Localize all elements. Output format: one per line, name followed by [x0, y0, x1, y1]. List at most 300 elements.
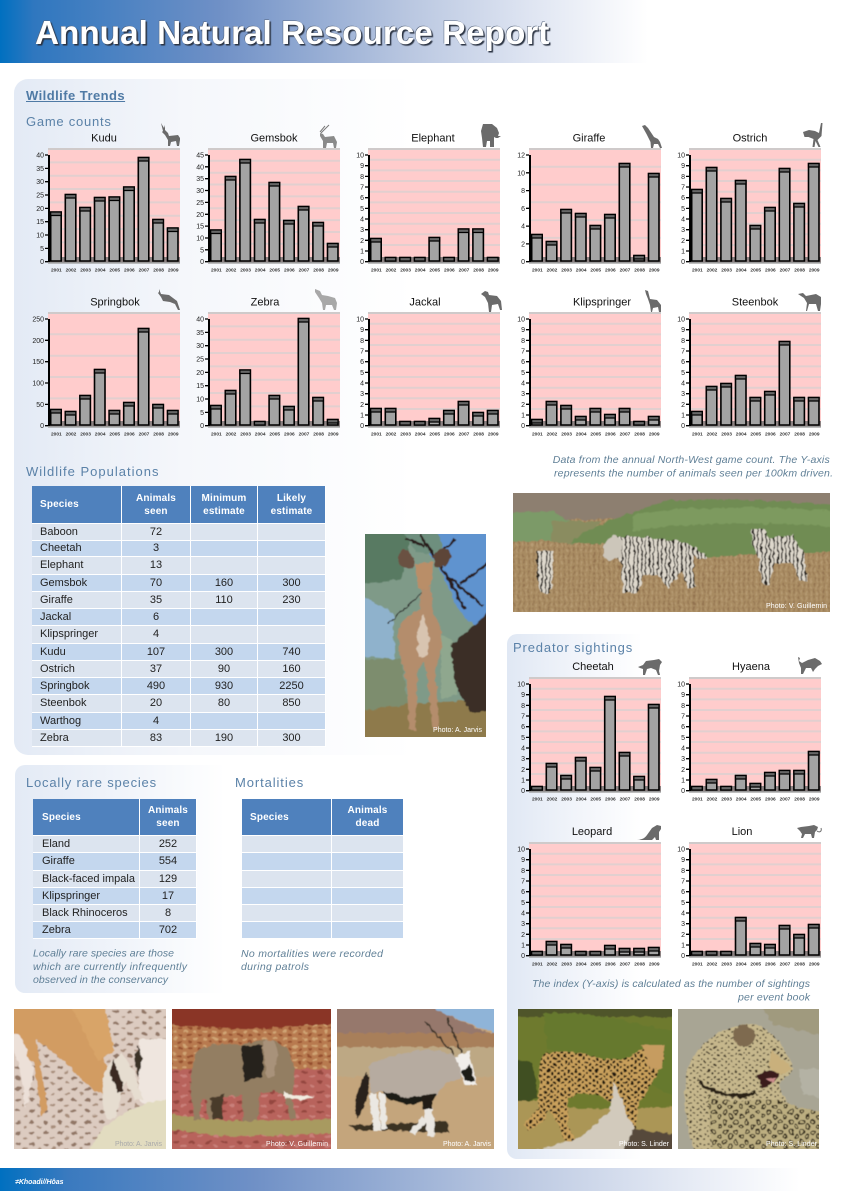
chart: zebra: Zebra	[251, 296, 280, 308]
chart: leopard: 8	[521, 868, 525, 875]
chart: lion: 2001 2002 2003 2004 2005 2006 2007 2008 2009	[692, 962, 820, 968]
chart: zebra: 0	[200, 423, 204, 430]
chart: gemsbok: 15	[196, 224, 204, 231]
chart: steenbok: 0	[681, 423, 685, 430]
chart: klipspringer: 10	[517, 316, 525, 324]
chart: steenbok: 7	[681, 348, 685, 356]
chart: elephant: 10	[356, 152, 364, 160]
chart: elephant: 5	[360, 206, 364, 213]
table: wildlife populations: Animals	[136, 492, 176, 504]
chart: klipspringer: 3	[521, 391, 525, 398]
chart: leopard: 7	[521, 878, 525, 886]
chart: klipspringer: 1	[521, 412, 525, 420]
chart: klipspringer: 6	[521, 359, 525, 366]
chart: leopard: 6	[521, 889, 525, 896]
chart: cheetah: 5	[521, 735, 525, 742]
chart: hyaena: 6	[681, 724, 685, 731]
icon: klipspringer	[645, 290, 661, 312]
chart: zebra: 2001 2002 2003 2004 2005 2006 2007 2008 2009	[211, 432, 339, 438]
chart: ostrich: 2001 2002 2003 2004 2005 2006 2007 2008 2009	[692, 268, 820, 274]
table: wildlife populations: 90	[218, 662, 230, 674]
photo: leopard	[678, 1009, 819, 1149]
chart: klipspringer: 0	[521, 423, 525, 430]
table: wildlife populations: seen	[144, 506, 168, 516]
chart: klipspringer: 5	[521, 370, 525, 377]
chart: ostrich: 8	[681, 174, 685, 181]
chart: lion: 0	[681, 953, 685, 960]
chart: ostrich: 9	[681, 163, 685, 170]
chart: hyaena: 10	[677, 682, 685, 688]
chart: ostrich: 1	[681, 248, 685, 256]
icon: hyaena	[798, 657, 822, 674]
chart: lion: 9	[681, 857, 685, 864]
note: no mortalities: during patrols	[241, 961, 310, 973]
chart: jackal: 2001 2002 2003 2004 2005 2006 2007 2008 2009	[371, 432, 499, 438]
chart: leopard: 9	[521, 857, 525, 864]
icon: lion	[797, 825, 821, 838]
photo: springbok: Photo: A. Jarvis	[115, 1141, 162, 1148]
chart: steenbok: 1	[681, 412, 685, 420]
table: wildlife populations: 110	[215, 594, 233, 606]
note: no mortalities	[241, 948, 384, 973]
chart: hyaena: 4	[681, 746, 685, 752]
heading: mortalities: Mortalities	[235, 774, 304, 790]
note: locally rare definition: observed in the conservancy	[33, 974, 169, 986]
chart: steenbok: 2001 2002 2003 2004 2005 2006 2007 2008 2009	[692, 432, 820, 438]
note: predator index: per event book	[737, 992, 811, 1004]
note: locally rare definition: which are currently infrequently	[33, 961, 188, 973]
chart: steenbok: Steenbok	[732, 296, 779, 308]
table: wildlife populations: Species	[40, 499, 79, 510]
photo: oryx: Photo: A. Jarvis	[443, 1141, 492, 1148]
footer band	[0, 1168, 842, 1191]
chart: ostrich: 10	[677, 152, 685, 160]
chart: jackal: 6	[360, 359, 364, 366]
table: wildlife populations: 3	[153, 542, 159, 554]
table: wildlife populations: estimate	[203, 506, 245, 516]
chart: steenbok: 9	[681, 327, 685, 334]
chart: cheetah: 8	[521, 703, 525, 710]
photo: kudu	[365, 534, 486, 737]
chart: elephant: 2001 2002 2003 2004 2005 2006 2007 2008 2009	[371, 268, 499, 274]
table: wildlife populations: 160	[215, 576, 233, 588]
chart: cheetah: 10	[517, 682, 525, 688]
table: wildlife populations: Baboon	[40, 526, 78, 538]
chart: hyaena: 9	[681, 692, 685, 699]
table: wildlife populations: 4	[153, 714, 159, 726]
chart: cheetah	[517, 659, 662, 802]
table: wildlife populations: Kudu	[40, 646, 66, 658]
heading: game counts: Game counts	[26, 114, 112, 128]
chart: zebra: 35	[196, 330, 204, 337]
chart: springbok: 200	[32, 338, 44, 345]
chart: gemsbok: 10	[196, 236, 204, 242]
table: wildlife populations: 37	[150, 662, 162, 674]
table: wildlife populations: 4	[153, 628, 159, 640]
chart: gemsbok: 20	[196, 212, 204, 219]
chart: hyaena: 5	[681, 735, 685, 742]
table: mortalities: Species	[250, 812, 289, 822]
table: wildlife populations: 20	[150, 697, 162, 709]
icon: springbok	[158, 289, 180, 310]
chart: hyaena: 8	[681, 703, 685, 710]
chart: giraffe: 0	[521, 259, 525, 266]
chart: hyaena: 2	[681, 767, 685, 774]
chart: ostrich: 7	[681, 184, 685, 192]
chart: gemsbok: 5	[200, 247, 204, 254]
icon: gemsbok	[320, 125, 337, 148]
chart: giraffe: 2	[521, 241, 525, 248]
chart: lion: 5	[681, 900, 685, 907]
icon: leopard	[637, 825, 661, 840]
chart: elephant: Elephant	[411, 132, 455, 144]
chart: kudu: 20	[36, 206, 44, 213]
chart: giraffe: 6	[521, 206, 525, 213]
table: wildlife populations: 107	[147, 646, 165, 658]
table: wildlife populations: Steenbok	[40, 697, 86, 709]
table: wildlife populations: Jackal	[40, 610, 71, 622]
table: wildlife populations: 930	[215, 680, 233, 692]
chart: gemsbok: 0	[200, 259, 204, 266]
chart: elephant: 9	[360, 163, 364, 170]
photo: elephant: Photo: V. Guillemin	[266, 1141, 328, 1148]
chart: hyaena: 0	[681, 788, 685, 795]
photo: leopard: Photo: S. Linder	[766, 1141, 818, 1148]
chart: springbok: 50	[36, 402, 44, 409]
chart: giraffe: 12	[517, 152, 525, 160]
chart: cheetah: 6	[521, 724, 525, 731]
chart: leopard: 5	[521, 900, 525, 907]
chart: jackal: 5	[360, 370, 364, 377]
chart: leopard: 0	[521, 953, 525, 960]
chart: steenbok: 6	[681, 359, 685, 366]
chart: steenbok	[677, 293, 821, 438]
chart: ostrich: 3	[681, 227, 685, 234]
chart: steenbok: 3	[681, 391, 685, 398]
table: locally rare species: 8	[165, 906, 171, 918]
chart: leopard	[517, 825, 661, 968]
chart: jackal: 2	[360, 402, 364, 409]
chart: lion: 1	[681, 942, 685, 950]
table: wildlife populations: 13	[150, 559, 162, 571]
heading: predator sightings: Predator sightings	[513, 640, 633, 654]
chart: gemsbok: 40	[196, 164, 204, 171]
chart: elephant: 7	[360, 184, 364, 192]
chart: lion: 7	[681, 878, 685, 886]
chart: steenbok: 2	[681, 402, 685, 409]
chart: cheetah: 2	[521, 767, 525, 774]
chart: zebra: 40	[196, 316, 204, 324]
chart: kudu: 25	[36, 192, 44, 200]
chart: gemsbok: Gemsbok	[250, 132, 298, 144]
chart: cheetah: 1	[521, 778, 525, 784]
chart: leopard: 3	[521, 921, 525, 928]
footer text: ≠Khoadi//Hôas	[15, 1179, 64, 1186]
chart: gemsbok: 35	[196, 176, 204, 183]
table: wildlife populations: Likely	[277, 492, 306, 504]
chart: zebra: 15	[196, 383, 204, 390]
chart: elephant: 3	[360, 227, 364, 234]
photo: elephant	[172, 1009, 331, 1149]
table: wildlife populations: Minimum	[202, 492, 246, 504]
chart: hyaena: 1	[681, 778, 685, 784]
chart: kudu: 0	[40, 259, 44, 266]
chart: kudu: 35	[36, 166, 44, 173]
chart: zebra: 30	[196, 343, 204, 350]
chart: lion	[677, 825, 821, 968]
chart: gemsbok	[196, 125, 340, 274]
chart: hyaena: 2001 2002 2003 2004 2005 2006 2007 2008 2009	[692, 796, 820, 802]
chart: ostrich: 2	[681, 238, 685, 245]
chart: jackal: 3	[360, 391, 364, 398]
icon: giraffe	[642, 125, 662, 148]
table: locally rare species: Zebra	[42, 924, 71, 936]
chart: jackal: 8	[360, 338, 364, 345]
panel: wildlife trends background	[14, 79, 414, 755]
table: locally rare species	[33, 799, 196, 939]
chart: giraffe: 4	[521, 224, 525, 231]
chart: springbok: 250	[32, 316, 44, 324]
chart: cheetah: Cheetah	[572, 661, 614, 673]
photo: springbok	[14, 1009, 166, 1149]
table: wildlife populations: Cheetah	[40, 542, 82, 554]
icon: jackal	[481, 291, 502, 312]
chart: zebra: 5	[200, 410, 204, 417]
photo: oryx	[337, 1009, 494, 1149]
table: mortalities	[242, 799, 403, 938]
heading: locally rare species: Locally rare species	[26, 774, 157, 790]
chart: ostrich	[677, 123, 822, 274]
table: wildlife populations: 850	[282, 697, 301, 709]
chart: kudu: Kudu	[91, 132, 117, 144]
note: predator index: The index (Y-axis) is calculated as the number of sightings	[532, 978, 811, 990]
chart: kudu: 30	[36, 179, 44, 186]
chart: lion: 4	[681, 910, 685, 918]
table: wildlife populations: Ostrich	[40, 662, 75, 674]
table: locally rare species: Animals	[148, 805, 188, 816]
title: Annual Natural Resource Report	[35, 15, 549, 52]
chart: springbok: 0	[40, 423, 44, 430]
table: locally rare species: 17	[162, 890, 174, 902]
table: mortalities: dead	[356, 818, 379, 829]
chart: zebra: 20	[196, 370, 204, 377]
predator charts	[517, 657, 822, 968]
chart: elephant: 1	[360, 248, 364, 256]
chart: jackal: 4	[360, 380, 364, 388]
chart: elephant: 2	[360, 238, 364, 245]
chart: klipspringer: 2	[521, 402, 525, 409]
chart: zebra	[196, 289, 340, 438]
chart: giraffe: 8	[521, 188, 525, 195]
table: wildlife populations: Elephant	[40, 559, 83, 571]
table: locally rare species: Giraffe	[42, 855, 75, 867]
photo: cheetah	[518, 1009, 672, 1149]
chart: gemsbok: 30	[196, 188, 204, 195]
table: wildlife populations: 72	[150, 526, 162, 538]
table: locally rare species: Black-faced impala	[42, 872, 135, 884]
chart: giraffe: Giraffe	[573, 132, 605, 144]
chart: gemsbok: 2001 2002 2003 2004 2005 2006 2007 2008 2009	[211, 268, 339, 274]
table: mortalities: Animals	[348, 805, 387, 816]
table: locally rare species: Black Rhinoceros	[42, 906, 128, 918]
table: wildlife populations: Klipspringer	[40, 628, 98, 640]
chart: klipspringer: Klipspringer	[573, 296, 631, 308]
chart: ostrich: 4	[681, 216, 685, 224]
chart: gemsbok: 25	[196, 200, 204, 207]
chart: hyaena: 7	[681, 714, 685, 720]
chart: elephant: 8	[360, 174, 364, 181]
chart: jackal: 0	[360, 423, 364, 430]
heading: wildlife trends: Wildlife Trends	[26, 88, 125, 102]
chart: gemsbok: 45	[196, 152, 204, 160]
chart: klipspringer: 4	[521, 380, 525, 388]
table: wildlife populations: 300	[215, 646, 233, 658]
chart: lion: 3	[681, 921, 685, 928]
table: locally rare species: Klipspringer	[42, 890, 100, 902]
chart: hyaena	[677, 657, 822, 802]
chart: lion: 2	[681, 932, 685, 939]
chart: hyaena: 3	[681, 756, 685, 763]
chart: lion: 10	[677, 846, 685, 854]
table: wildlife populations: Springbok	[40, 680, 90, 692]
table: wildlife populations: 2250	[279, 680, 304, 692]
chart: lion: Lion	[732, 826, 752, 838]
table: wildlife populations: Gemsbok	[40, 576, 87, 588]
chart: cheetah: 3	[521, 756, 525, 763]
chart: steenbok: 8	[681, 338, 685, 345]
chart: klipspringer	[517, 290, 661, 438]
icon: cheetah	[638, 659, 662, 675]
note: game count source: Data from the annual North-West game count. The Y-axis	[553, 454, 830, 466]
chart: cheetah: 0	[521, 788, 525, 795]
table: wildlife populations: 83	[150, 732, 162, 744]
chart: giraffe	[517, 125, 662, 274]
note: game count source: represents the number of animals seen per 100km driven.	[554, 468, 833, 480]
chart: leopard: 10	[517, 846, 525, 854]
note: predator index	[532, 978, 811, 1004]
chart: giraffe: 2001 2002 2003 2004 2005 2006 2007 2008 2009	[532, 268, 660, 274]
heading: wildlife populations: Wildlife Populations	[26, 464, 159, 479]
panel: locally rare species background	[15, 765, 225, 993]
note: locally rare definition: Locally rare species are those	[33, 948, 174, 960]
chart: leopard: 2	[521, 932, 525, 939]
chart: lion: 6	[681, 889, 685, 896]
table: wildlife populations: 190	[215, 732, 233, 744]
chart: elephant: 0	[360, 259, 364, 266]
chart: elephant	[356, 124, 501, 274]
chart: springbok: 100	[32, 380, 44, 388]
table: wildlife populations	[32, 486, 325, 747]
chart: zebra: 10	[196, 396, 204, 404]
chart: kudu: 5	[40, 246, 44, 253]
panel: predator sightings background	[507, 634, 642, 1159]
chart: jackal: 1	[360, 412, 364, 420]
chart: klipspringer: 2001 2002 2003 2004 2005 2006 2007 2008 2009	[532, 432, 660, 438]
chart: springbok: 150	[32, 359, 44, 366]
table: locally rare species: 554	[159, 855, 177, 867]
table: wildlife populations: 230	[282, 594, 301, 606]
table: wildlife populations: Giraffe	[40, 594, 73, 606]
chart: elephant: 4	[360, 216, 364, 224]
table: wildlife populations: 160	[282, 662, 301, 674]
table: wildlife populations: estimate	[271, 506, 312, 516]
chart: kudu: 2001 2002 2003 2004 2005 2006 2007 2008 2009	[51, 268, 179, 274]
icon: zebra	[315, 289, 337, 310]
icon: elephant	[481, 124, 501, 147]
chart: leopard: 4	[521, 910, 525, 918]
chart: leopard: 2001 2002 2003 2004 2005 2006 2007 2008 2009	[532, 962, 660, 968]
chart: giraffe: 10	[517, 170, 525, 177]
chart: steenbok: 4	[681, 380, 685, 388]
chart: jackal: Jackal	[409, 296, 441, 308]
chart: hyaena: Hyaena	[732, 661, 771, 673]
chart: klipspringer: 8	[521, 338, 525, 345]
table: wildlife populations: 35	[150, 594, 162, 606]
note: locally rare definition	[33, 948, 188, 986]
chart: steenbok: 10	[677, 316, 685, 324]
chart: klipspringer: 9	[521, 327, 525, 334]
table: wildlife populations: Warthog	[40, 714, 81, 726]
icon: steenbok	[798, 293, 821, 311]
photo: kudu: Photo: A. Jarvis	[433, 727, 482, 734]
table: locally rare species: 129	[159, 872, 177, 884]
chart: jackal	[356, 291, 502, 438]
table: wildlife populations: 300	[282, 732, 301, 744]
chart: ostrich: 0	[681, 259, 685, 266]
table: wildlife populations: Zebra	[40, 732, 69, 744]
chart: jackal: 10	[356, 316, 364, 324]
chart: cheetah: 2001 2002 2003 2004 2005 2006 2007 2008 2009	[532, 796, 660, 802]
table: wildlife populations: 740	[282, 646, 301, 658]
chart: leopard: 1	[521, 942, 525, 950]
table: wildlife populations: 300	[282, 576, 301, 588]
table: wildlife populations: 70	[150, 576, 162, 588]
table: wildlife populations: 6	[153, 610, 159, 622]
chart: cheetah: 7	[521, 714, 525, 720]
chart: kudu: 40	[36, 152, 44, 160]
chart: klipspringer: 7	[521, 348, 525, 356]
chart: jackal: 9	[360, 327, 364, 334]
chart: ostrich: Ostrich	[733, 132, 767, 144]
chart: springbok	[32, 289, 180, 438]
chart: springbok: Springbok	[90, 296, 140, 308]
icon: kudu	[161, 123, 180, 146]
chart: kudu: 10	[36, 232, 44, 240]
chart: zebra: 25	[196, 356, 204, 364]
table: locally rare species: 252	[159, 838, 177, 850]
table: locally rare species: Species	[42, 812, 81, 822]
table: wildlife populations: 490	[147, 680, 165, 692]
table: locally rare species: Eland	[42, 838, 70, 850]
chart: kudu	[36, 123, 180, 274]
chart: springbok: 2001 2002 2003 2004 2005 2006 2007 2008 2009	[51, 432, 179, 438]
game count charts	[32, 123, 822, 438]
table: locally rare species: seen	[156, 818, 180, 829]
chart: leopard: Leopard	[572, 826, 612, 838]
photo: zebras: Photo: V. Guillemin	[766, 603, 827, 610]
chart: ostrich: 5	[681, 206, 685, 213]
chart: kudu: 15	[36, 219, 44, 226]
note: no mortalities: No mortalities were recorded	[241, 948, 384, 960]
note: game count source	[553, 454, 833, 480]
photo: zebras	[513, 493, 830, 612]
chart: jackal: 7	[360, 348, 364, 356]
table: wildlife populations: 80	[218, 697, 230, 709]
chart: elephant: 6	[360, 195, 364, 202]
chart: ostrich: 6	[681, 195, 685, 202]
chart: lion: 8	[681, 868, 685, 875]
chart: cheetah: 9	[521, 692, 525, 699]
